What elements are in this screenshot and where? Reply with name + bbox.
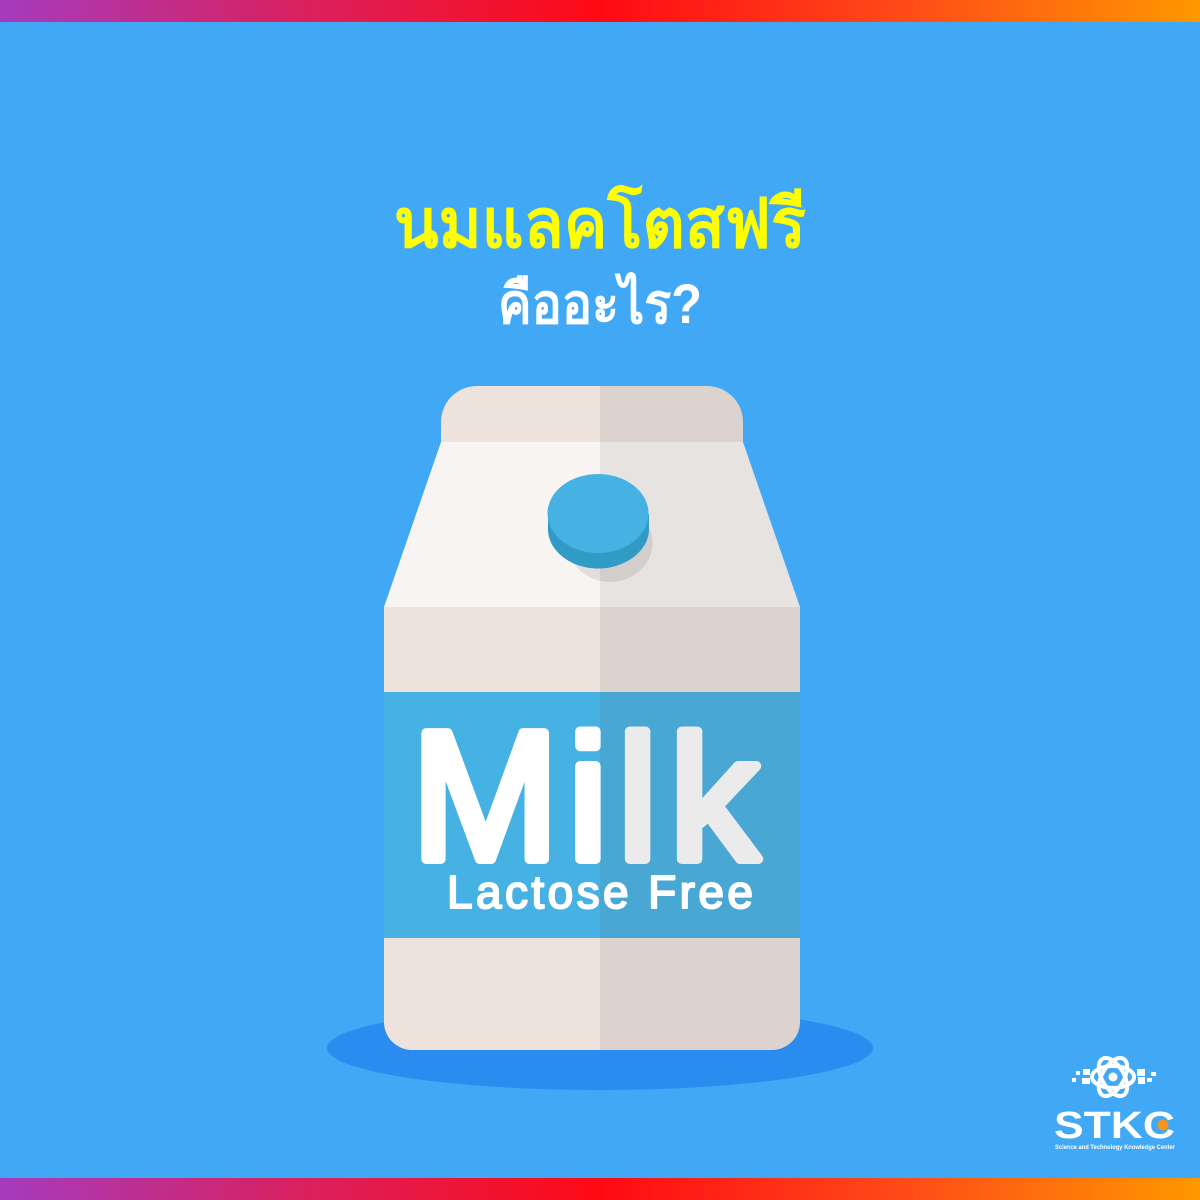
label text Milk: k <box>670 701 759 897</box>
title line 1: นมแลคโตสฟรี <box>394 184 806 262</box>
label text Milk: i <box>568 701 608 897</box>
label text Milk: M <box>412 693 559 898</box>
STKC logo <box>1054 1053 1176 1151</box>
label text Lactose Free: Lactose Free <box>447 866 753 918</box>
milk carton <box>384 386 800 1050</box>
carton top tab <box>441 386 600 442</box>
logo tagline: Science and Technology Knowledge Center <box>1055 1145 1176 1151</box>
carton label band <box>384 692 600 938</box>
bottom gradient bar <box>0 1178 1200 1200</box>
label text Milk: l <box>618 701 657 897</box>
logo wordmark: STKC <box>1054 1105 1175 1147</box>
label text Milk <box>412 693 759 898</box>
top gradient bar <box>0 0 1200 22</box>
ground shadow ellipse <box>327 1006 873 1090</box>
carton sloped roof <box>384 442 600 607</box>
logo atom icon <box>1072 1053 1156 1101</box>
title line 2: คืออะไร? <box>498 271 702 335</box>
cap shadow <box>568 504 652 582</box>
bottle cap <box>548 474 652 582</box>
title <box>394 184 806 335</box>
carton body <box>384 607 600 1050</box>
logo orange dot <box>1158 1120 1168 1130</box>
